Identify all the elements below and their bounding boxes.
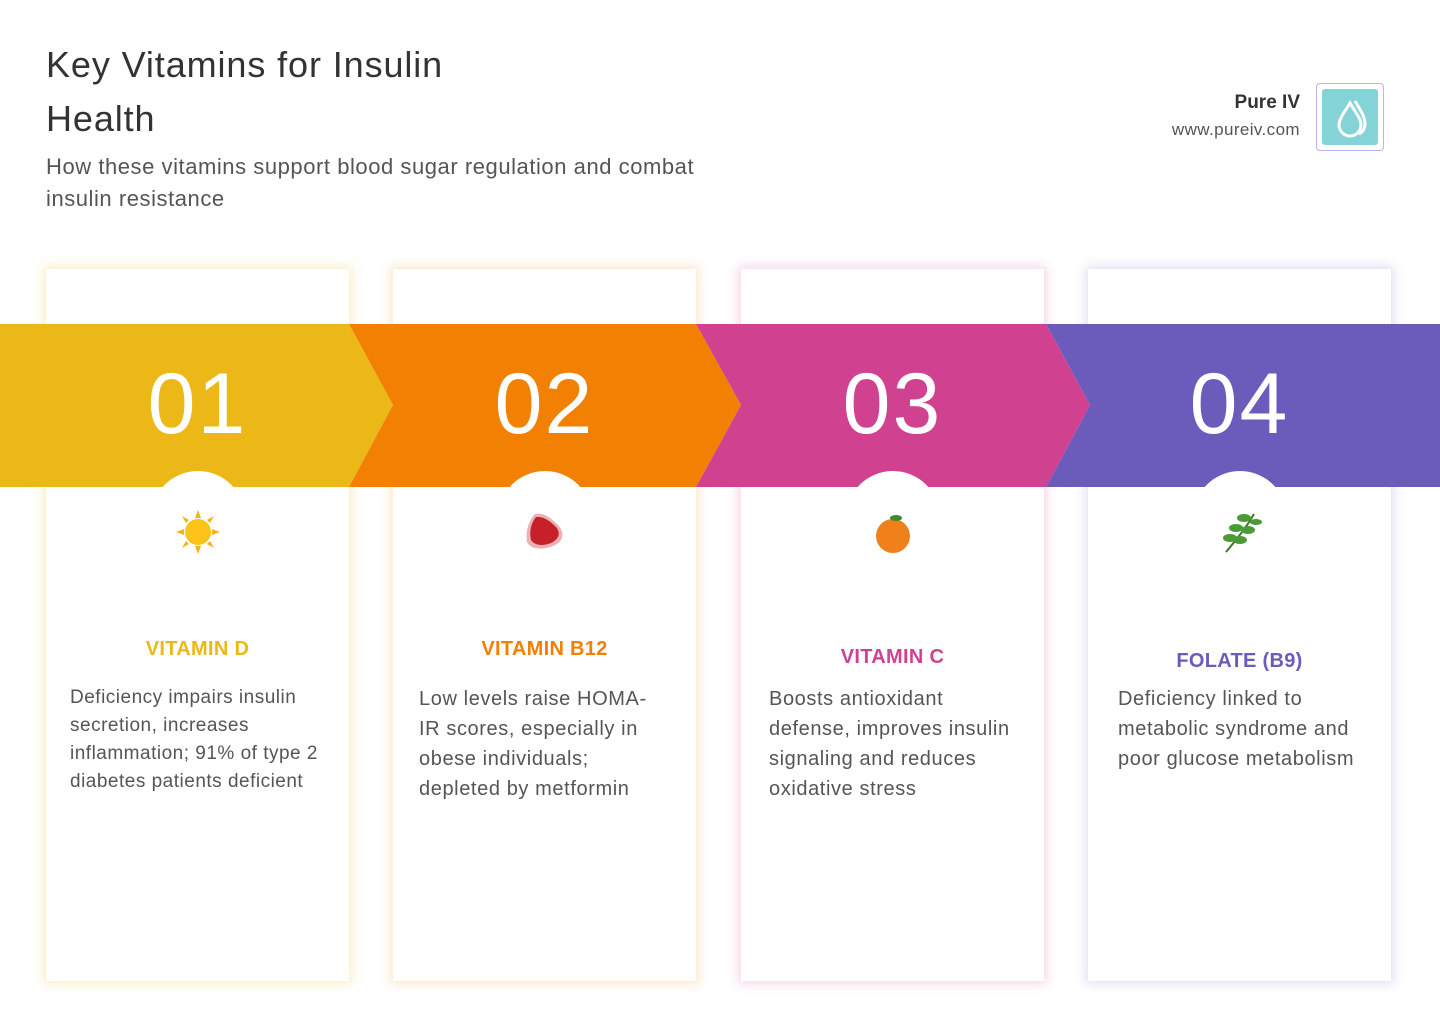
text: vitamin D: inflammation; 91% of type 2 (70, 743, 318, 764)
text: B12: IR scores, especially in (419, 718, 638, 740)
numbers: 01 (148, 356, 247, 452)
text: vitamin D: diabetes patients deficient (70, 771, 303, 792)
text: 02 (495, 356, 594, 452)
icon: herb (1223, 514, 1262, 553)
text: B12: Low levels raise HOMA- (419, 688, 647, 710)
heading: C: VITAMIN C (841, 646, 944, 668)
subtitle (46, 154, 694, 211)
text: C: oxidative stress (769, 778, 916, 800)
heading: folate: FOLATE (B9) (1176, 650, 1303, 672)
text: vitamin D: secretion, increases (70, 715, 249, 736)
title: Health (46, 98, 155, 139)
bumps (151, 471, 245, 565)
heading: B12: VITAMIN B12 (481, 638, 608, 660)
title: Key Vitamins for Insulin (46, 44, 443, 85)
brand name: Pure IV (1235, 92, 1300, 113)
title (46, 44, 443, 139)
text: B12: obese individuals; (419, 748, 589, 770)
icon: orange (876, 515, 910, 553)
heading: vitamin D: VITAMIN D (146, 638, 249, 660)
text: C: signaling and reduces (769, 748, 976, 770)
card 3 (741, 269, 1044, 981)
text: folate: metabolic syndrome and (1118, 718, 1349, 740)
text: B12: depleted by metformin (419, 778, 629, 800)
brand (1172, 83, 1384, 151)
text: C: Boosts antioxidant (769, 688, 943, 710)
text: folate: poor glucose metabolism (1118, 748, 1354, 770)
text: 03 (843, 356, 942, 452)
brand url: www.pureiv.com (1172, 120, 1300, 139)
text: vitamin D: Deficiency impairs insulin (70, 687, 296, 708)
subtitle: insulin resistance (46, 186, 225, 211)
text: folate (1118, 688, 1354, 770)
text: C (769, 688, 1010, 800)
text: vitamin D (70, 687, 318, 792)
logo (1316, 83, 1384, 151)
subtitle: How these vitamins support blood sugar regulation and combat (46, 154, 694, 179)
icon: meat (526, 514, 562, 549)
card 2 (393, 269, 696, 981)
card 1 (46, 269, 349, 981)
text: B12 (419, 688, 647, 800)
text: 04 (1190, 356, 1289, 452)
text: C: defense, improves insulin (769, 718, 1010, 740)
text: folate: Deficiency linked to (1118, 688, 1302, 710)
card 4 (1088, 269, 1391, 981)
arrow banner (0, 324, 1440, 487)
icon: sun (176, 510, 220, 554)
